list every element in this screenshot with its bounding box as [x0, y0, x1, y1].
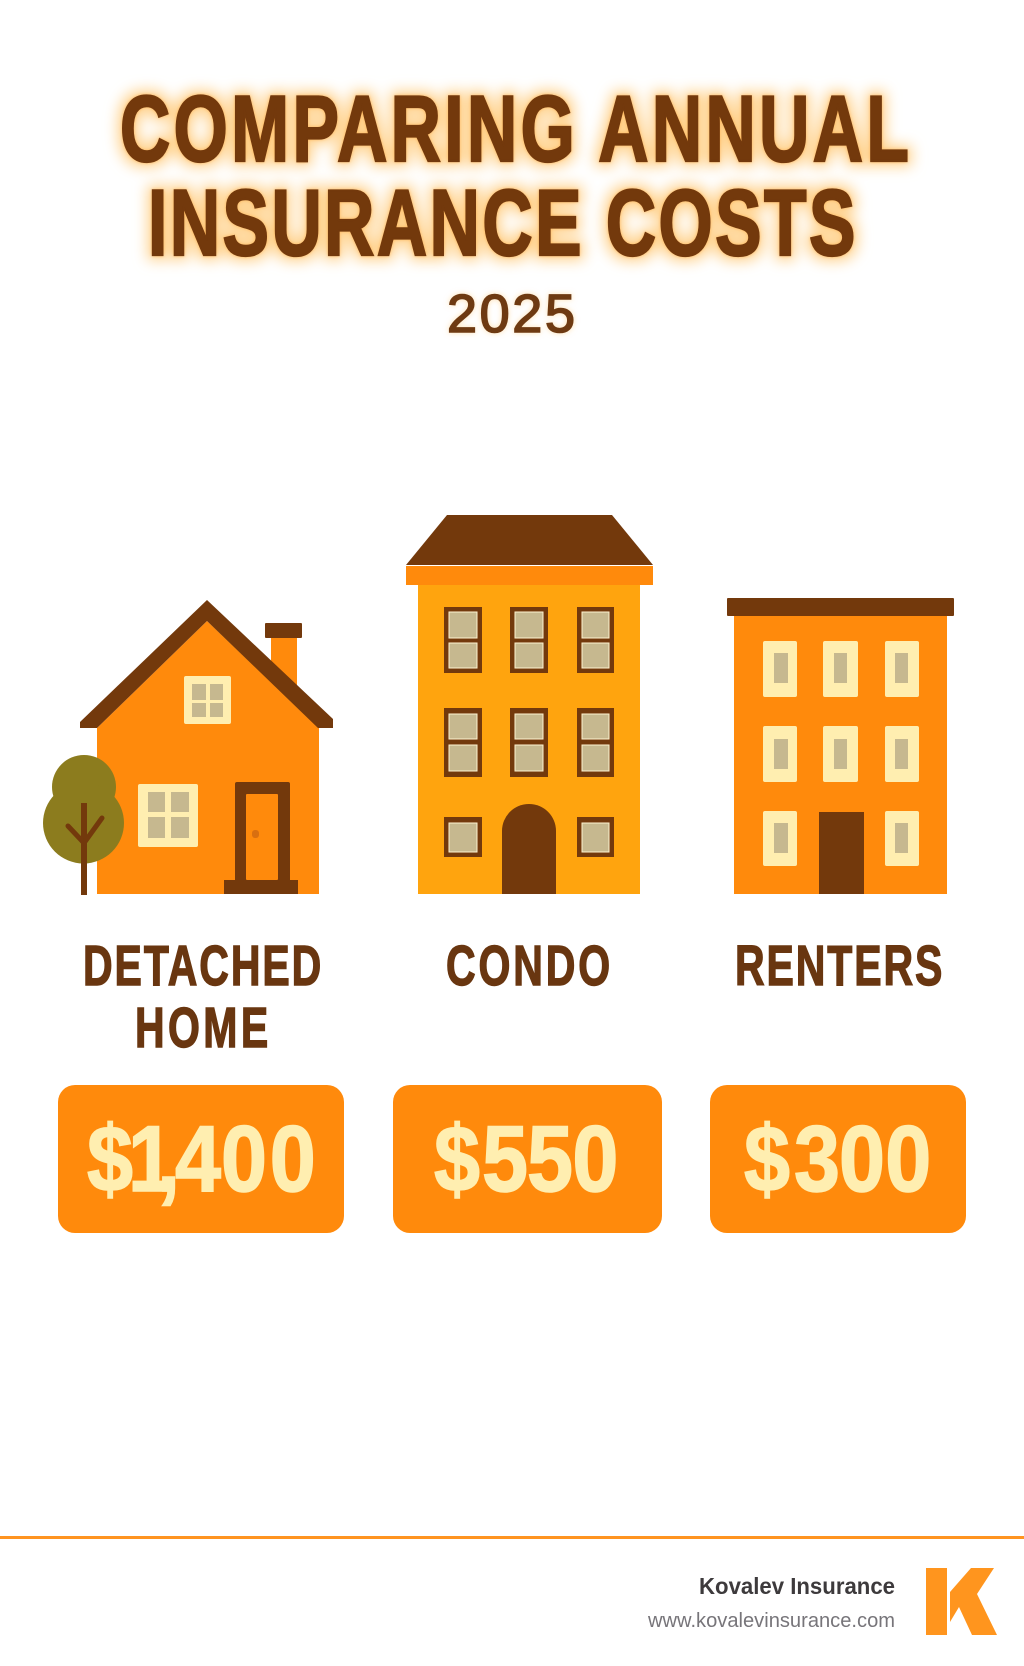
label: detached home: HOME	[135, 995, 268, 1060]
price card: condo	[393, 1085, 662, 1233]
price card: renters: $300	[744, 1106, 931, 1211]
label: condo: CONDO	[446, 933, 610, 998]
footer divider	[0, 1536, 1024, 1539]
footer: company name: Kovalev Insurance	[699, 1573, 895, 1599]
icon: rental building	[727, 598, 954, 894]
price card: renters	[710, 1085, 966, 1233]
logo: K	[926, 1568, 997, 1635]
price card: detached home: $1,400	[87, 1106, 316, 1211]
title: COMPARING ANNUAL	[120, 76, 909, 181]
label: renters: RENTERS	[735, 933, 942, 998]
price card: condo: $550	[434, 1106, 618, 1211]
title	[120, 76, 909, 275]
icon: condo building	[406, 515, 653, 894]
footer: website: www.kovalevinsurance.com	[647, 1610, 895, 1632]
subtitle: year: 2025	[447, 284, 575, 344]
icon: detached home	[43, 600, 333, 895]
label: detached home: DETACHED	[83, 933, 321, 998]
price card: detached home	[58, 1085, 344, 1233]
label: detached home	[83, 933, 321, 1060]
title: INSURANCE COSTS	[148, 170, 855, 275]
